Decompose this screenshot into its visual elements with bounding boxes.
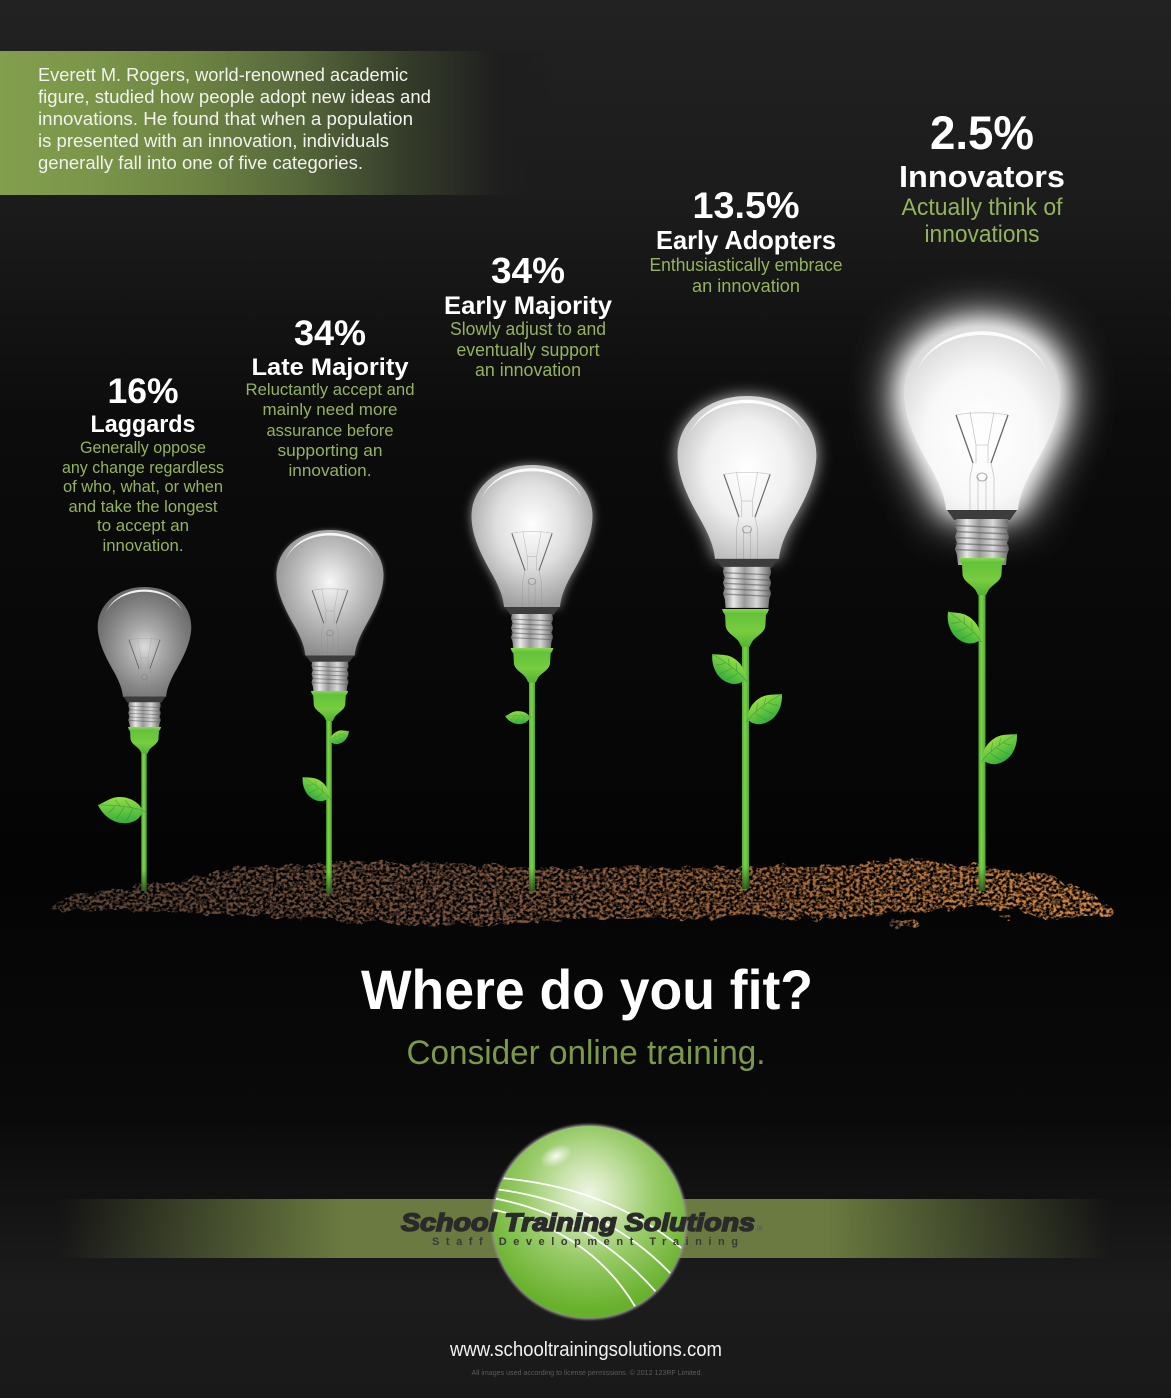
- laggards text: Generally oppose: [80, 439, 206, 457]
- late majority text: 34%: [294, 314, 366, 353]
- laggards text: innovation.: [102, 537, 184, 555]
- laggards text: Laggards: [90, 411, 196, 438]
- early adopters text: 13.5%: [692, 185, 800, 226]
- late majority stem: [296, 715, 352, 894]
- early adopters stem: [704, 635, 790, 889]
- laggards text: [62, 372, 224, 555]
- innovators text: 2.5%: [930, 106, 1034, 159]
- laggards text: any change regardless: [62, 459, 224, 477]
- early adopters text: Enthusiastically embrace: [650, 254, 842, 275]
- late majority text: [246, 314, 414, 480]
- late majority text: Late Majority: [252, 354, 409, 381]
- logo sphere: [490, 1124, 686, 1320]
- soil: [50, 859, 1115, 928]
- early majority bulb: [471, 465, 593, 682]
- early majority text: 34%: [491, 250, 565, 291]
- stage: late majority: [246, 314, 414, 894]
- innovators text: Actually think of: [902, 194, 1063, 221]
- laggards text: of who, what, or when: [63, 478, 223, 496]
- late majority text: innovation.: [288, 461, 372, 480]
- early majority stem: [505, 675, 535, 891]
- headline: Where do you fit?: [361, 958, 813, 1021]
- early adopters bulb: [678, 396, 816, 647]
- laggards bulb: [98, 587, 191, 754]
- subheadline: Consider online training.: [406, 1034, 766, 1072]
- early majority text: Early Majority: [444, 292, 612, 320]
- early adopters text: Early Adopters: [656, 225, 836, 255]
- early majority text: eventually support: [456, 340, 600, 360]
- laggards stem: [98, 745, 147, 891]
- innovators text: innovations: [924, 221, 1040, 248]
- laggards text: to accept an: [97, 517, 189, 535]
- intro banner: innovations. He found that when a population: [38, 108, 413, 129]
- intro banner: is presented with an innovation, individuals: [38, 130, 389, 151]
- logo tagline: Staff Development Training: [432, 1236, 738, 1248]
- intro banner: figure, studied how people adopt new ideas and: [38, 86, 431, 107]
- copyright: All images used according to license permissions. © 2012 123RF Limited.: [472, 1368, 702, 1377]
- stage: early adopters: [650, 185, 842, 889]
- laggards text: 16%: [108, 372, 178, 411]
- early majority text: [444, 250, 612, 380]
- intro banner: Everett M. Rogers, world-renowned academic: [38, 64, 408, 85]
- logo: [401, 1124, 763, 1320]
- innovators bulb: [904, 327, 1060, 595]
- registered mark: ®: [757, 1224, 763, 1233]
- stage: innovators: [899, 106, 1065, 891]
- logo wordmark: School Training Solutions: [401, 1209, 755, 1237]
- stage: laggards: [62, 372, 224, 891]
- innovators text: [899, 106, 1065, 248]
- intro banner: generally fall into one of five categories.: [38, 152, 363, 173]
- laggards text: and take the longest: [68, 498, 218, 516]
- stage: early majority: [444, 250, 612, 891]
- innovators stem: [938, 590, 1025, 891]
- late majority text: supporting an: [278, 441, 382, 460]
- early adopters text: [650, 185, 842, 296]
- late majority bulb: [276, 530, 384, 721]
- innovators text: Innovators: [899, 159, 1065, 194]
- late majority text: mainly need more: [262, 400, 398, 419]
- intro banner: [0, 51, 556, 195]
- early majority text: an innovation: [475, 360, 581, 380]
- early adopters text: an innovation: [692, 275, 800, 296]
- logo band: [60, 1199, 1110, 1258]
- late majority text: Reluctantly accept and: [246, 380, 414, 399]
- early majority text: Slowly adjust to and: [450, 319, 606, 339]
- late majority text: assurance before: [266, 421, 394, 440]
- website: www.schooltrainingsolutions.com: [449, 1339, 722, 1361]
